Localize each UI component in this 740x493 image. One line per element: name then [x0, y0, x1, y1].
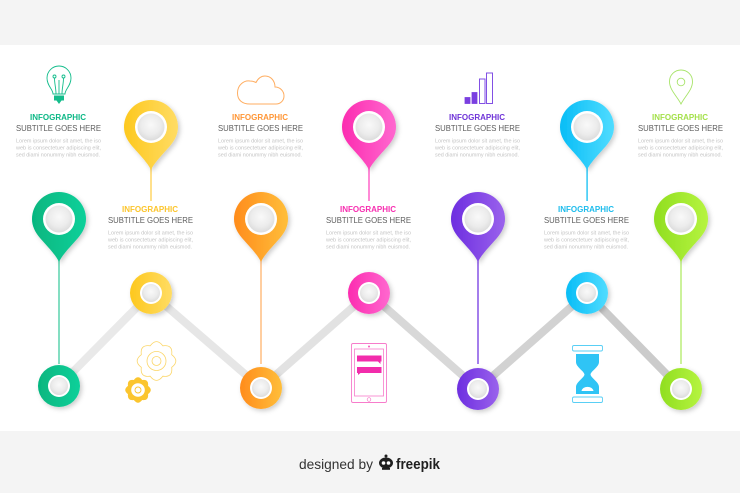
text block: pink: web is consectetuer adipiscing elit, — [325, 238, 411, 244]
text block: green: sed diami nonummy nibh euismod. — [16, 152, 100, 158]
text block: green: INFOGRAPHIC — [30, 113, 86, 122]
text block: purple — [434, 113, 520, 158]
text block: orange: INFOGRAPHIC — [232, 113, 288, 122]
text block: lime: Lorem ipsum dolor sit amet, the iso — [638, 138, 723, 144]
text block: lime — [637, 113, 723, 158]
text block: orange: sed diami nonummy nibh euismod. — [218, 152, 302, 158]
text block: orange: Lorem ipsum dolor sit amet, the iso — [218, 138, 303, 144]
text block: lime: INFOGRAPHIC — [652, 113, 708, 122]
text block: green: web is consectetuer adipiscing elit, — [15, 146, 101, 152]
node: orange — [240, 367, 282, 409]
bottom band — [0, 431, 740, 493]
text block: orange — [217, 113, 303, 158]
text block: lime: sed diami nonummy nibh euismod. — [638, 152, 722, 158]
text block: yellow: INFOGRAPHIC — [122, 205, 178, 214]
node: green — [38, 365, 80, 407]
text block: cyan: sed diami nonummy nibh euismod. — [544, 244, 628, 250]
node: purple — [457, 368, 499, 410]
text block: cyan: web is consectetuer adipiscing elit, — [543, 238, 629, 244]
node: lime — [660, 368, 702, 410]
icon: gears — [125, 342, 176, 403]
text block: orange: SUBTITLE GOES HERE — [218, 123, 303, 133]
text block: pink: INFOGRAPHIC — [340, 205, 396, 214]
node: yellow — [130, 272, 172, 314]
pin: purple — [451, 192, 505, 262]
text block: yellow: web is consectetuer adipiscing elit, — [107, 238, 193, 244]
text block: yellow: Lorem ipsum dolor sit amet, the iso — [108, 230, 193, 236]
text block: yellow: sed diami nonummy nibh euismod. — [108, 244, 192, 250]
text block: purple: sed diami nonummy nibh euismod. — [435, 152, 519, 158]
text block: purple: web is consectetuer adipiscing elit, — [434, 146, 520, 152]
text block: lime: web is consectetuer adipiscing elit, — [637, 146, 723, 152]
text block: purple: INFOGRAPHIC — [449, 113, 505, 122]
icon: location outline — [670, 70, 692, 104]
text block: green: SUBTITLE GOES HERE — [16, 123, 101, 133]
pin: green — [32, 192, 86, 262]
pin: pink — [342, 100, 396, 170]
text block: orange: web is consectetuer adipiscing elit, — [217, 146, 303, 152]
top band — [0, 0, 740, 45]
text block: pink: sed diami nonummy nibh euismod. — [326, 244, 410, 250]
text block: cyan: INFOGRAPHIC — [558, 205, 614, 214]
text block: cyan: SUBTITLE GOES HERE — [544, 215, 629, 225]
zigzag connector — [59, 293, 681, 389]
icon: bar chart — [465, 73, 492, 104]
text block: purple: Lorem ipsum dolor sit amet, the iso — [435, 138, 520, 144]
pin: lime — [654, 192, 708, 262]
node: cyan — [566, 272, 608, 314]
text block: green — [15, 113, 101, 158]
icon: hourglass — [572, 346, 602, 402]
pin: yellow — [124, 100, 178, 170]
icon: freepik logo — [379, 454, 393, 470]
pin: cyan — [560, 100, 614, 170]
text block: cyan — [543, 205, 629, 250]
footer credit: freepik — [396, 457, 441, 473]
text block: pink: Lorem ipsum dolor sit amet, the iso — [326, 230, 411, 236]
icon: cloud — [238, 76, 284, 104]
text block: pink: SUBTITLE GOES HERE — [326, 215, 411, 225]
text block: yellow: SUBTITLE GOES HERE — [108, 215, 193, 225]
node: pink — [348, 272, 390, 314]
icon: tablet with messages — [352, 344, 386, 402]
text block: pink — [325, 205, 411, 250]
text block: cyan: Lorem ipsum dolor sit amet, the iso — [544, 230, 629, 236]
text block: purple: SUBTITLE GOES HERE — [435, 123, 520, 133]
footer credit: designed by — [299, 456, 373, 472]
text block: green: Lorem ipsum dolor sit amet, the iso — [16, 138, 101, 144]
footer credit — [299, 454, 441, 473]
pin: orange — [234, 192, 288, 262]
text block: yellow — [107, 205, 193, 250]
stem lines — [58, 168, 682, 364]
text block: lime: SUBTITLE GOES HERE — [638, 123, 723, 133]
icon: light bulb — [47, 66, 71, 104]
